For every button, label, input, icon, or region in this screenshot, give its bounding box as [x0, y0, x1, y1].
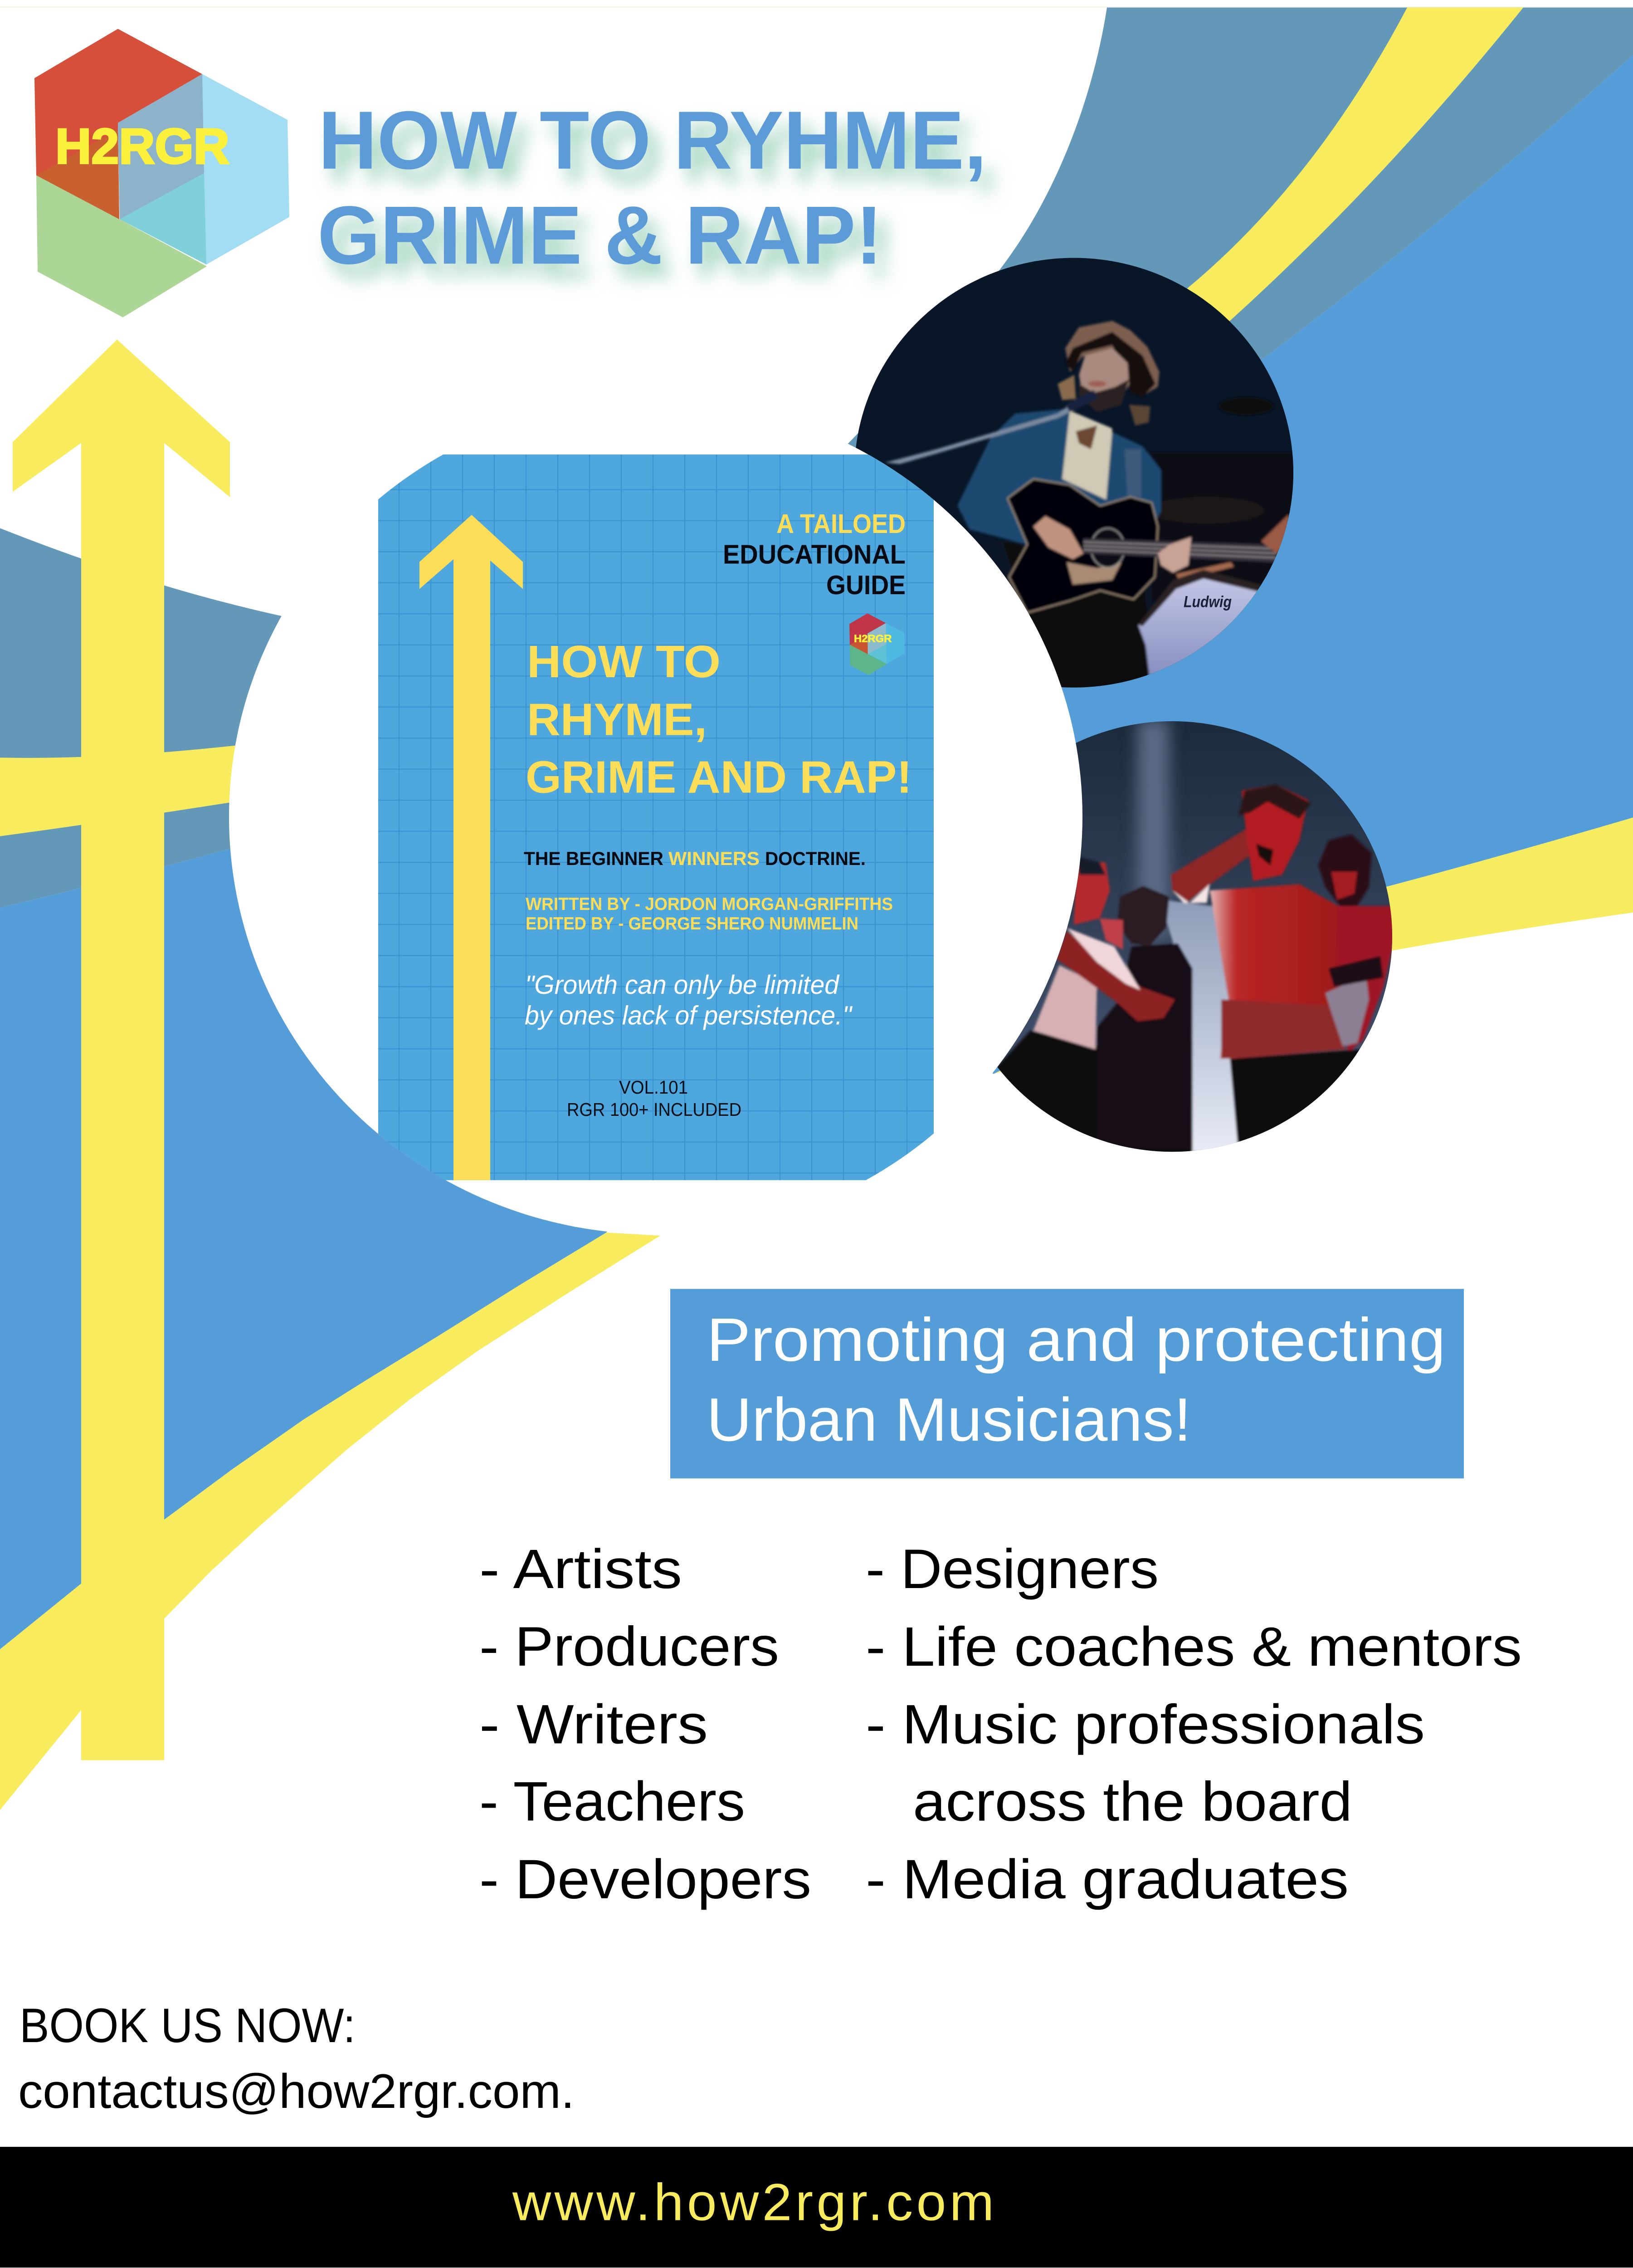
panel: book cover — [378, 455, 934, 1180]
footer bar: www.how2rgr.com — [512, 2172, 994, 2231]
book credits: EDITED BY - GEORGE SHERO NUMMELIN — [526, 914, 858, 934]
icon: small H2RGR logo: H2RGR — [854, 633, 892, 645]
book title — [526, 637, 912, 802]
contact details — [18, 1998, 575, 2118]
book credits: WRITTEN BY - JORDON MORGAN-GRIFFITHS — [526, 894, 893, 914]
background: right yellow stripe — [993, 817, 1633, 1074]
icon: book cover arrow — [419, 515, 523, 1180]
book quote — [525, 969, 853, 1030]
background: left grey-blue band — [0, 528, 345, 908]
logo: H2RGR hexagon — [34, 29, 289, 318]
title: HOW TO RYHME, — [318, 94, 987, 186]
photo text: drum logo: Ludwig — [1184, 593, 1232, 611]
panel: promoting banner — [670, 1289, 1464, 1478]
audience list: left column: - Artists — [479, 1538, 682, 1600]
icon: small H2RGR logo — [849, 613, 905, 675]
title: GRIME & RAP! — [317, 189, 882, 281]
book credits — [526, 894, 893, 934]
central white circle — [229, 399, 1082, 1234]
book subtitle — [524, 848, 866, 870]
book title: GRIME AND RAP! — [526, 753, 912, 802]
background: top-right blue field — [862, 55, 1633, 1074]
audience list: left column — [479, 1538, 811, 1911]
book quote: by ones lack of persistence." — [525, 1000, 853, 1030]
book volume note — [567, 1076, 741, 1120]
icon: large yellow arrow — [13, 340, 230, 1760]
book tagline: A TAILOED — [776, 508, 906, 539]
footer bar — [0, 2147, 1633, 2268]
audience list: right column: - Designers — [866, 1538, 1159, 1600]
photo: singer with guitar — [848, 255, 1301, 696]
book tagline: GUIDE — [826, 570, 906, 600]
audience list: left column: - Developers — [479, 1848, 811, 1911]
book quote: "Growth can only be limited — [525, 969, 840, 1000]
book subtitle: THE BEGINNER — [524, 848, 663, 870]
audience list: right column: across the board — [913, 1771, 1352, 1833]
panel: promoting banner: Urban Musicians! — [707, 1385, 1191, 1454]
book tagline: EDUCATIONAL — [723, 539, 906, 570]
background: left yellow band — [0, 743, 281, 836]
background: top-right yellow stripe — [1134, 8, 1523, 355]
logo: H2RGR hexagon: H2RGR — [55, 119, 229, 174]
audience list: left column: - Teachers — [479, 1771, 745, 1833]
background: top-right grey-blue sweep — [843, 8, 1633, 577]
audience list: right column — [866, 1538, 1522, 1911]
top hairline — [0, 7, 1633, 8]
background: left blue field — [0, 843, 635, 1649]
photo: band on stage in red light — [997, 721, 1392, 1152]
book subtitle: DOCTRINE. — [765, 848, 866, 870]
title — [317, 94, 987, 281]
background: lower-left yellow sweep — [0, 1232, 660, 1810]
panel: promoting banner: Promoting and protecting — [707, 1305, 1446, 1374]
audience list: right column: - Media graduates — [866, 1848, 1349, 1911]
audience list: left column: - Writers — [479, 1694, 708, 1755]
book tagline — [725, 514, 905, 594]
contact details: contactus@how2rgr.com. — [18, 2064, 575, 2118]
book volume note: RGR 100+ INCLUDED — [567, 1099, 741, 1120]
book title: RHYME, — [527, 694, 707, 745]
audience list: right column: - Life coaches & mentors — [866, 1616, 1522, 1678]
contact details: BOOK US NOW: — [19, 1998, 356, 2053]
book volume note: VOL.101 — [619, 1076, 688, 1098]
audience list: left column: - Producers — [479, 1616, 779, 1678]
book title: HOW TO — [527, 637, 721, 687]
book subtitle: WINNERS — [668, 848, 760, 870]
audience list: right column: - Music professionals — [866, 1694, 1425, 1755]
